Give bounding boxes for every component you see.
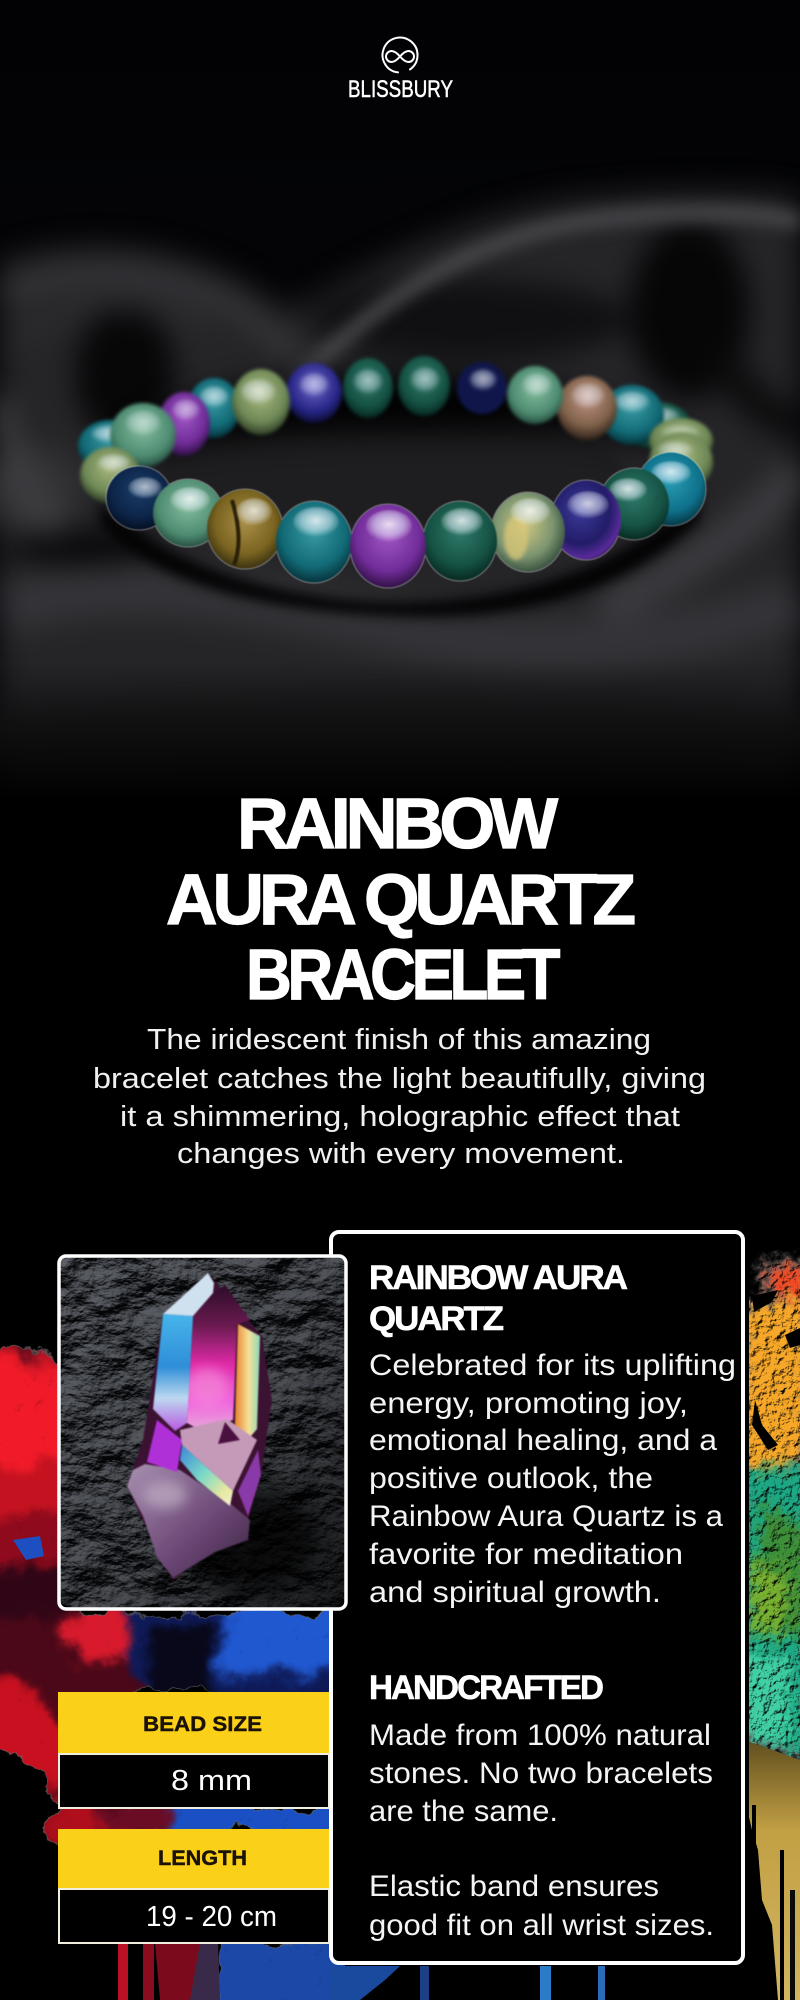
value: 8 mm bbox=[171, 1765, 252, 1797]
text: rainbow aura quartz description: and spiritual growth. bbox=[369, 1576, 661, 1609]
rock background bbox=[57, 1254, 348, 1611]
photo frame bbox=[59, 1256, 346, 1609]
heading: rainbow aura quartz: RAINBOW AURA bbox=[369, 1259, 627, 1297]
photo: rainbow aura quartz crystal bbox=[57, 1254, 348, 1611]
logo bbox=[348, 38, 453, 103]
cloth inside the bracelet bbox=[168, 451, 616, 516]
heading: rainbow aura quartz bbox=[369, 1259, 627, 1338]
hero photo: bracelet on black satin bbox=[0, 172, 800, 770]
description: changes with every movement. bbox=[177, 1138, 625, 1170]
bracelet beads bbox=[78, 356, 713, 588]
spec: bead size bbox=[58, 1692, 329, 1808]
title bbox=[166, 785, 635, 1015]
back beads bbox=[78, 356, 713, 503]
text: rainbow aura quartz description: emotional healing, and a bbox=[369, 1424, 717, 1457]
label: BEAD SIZE bbox=[143, 1713, 262, 1736]
text: handcrafted description: stones. No two bracelets bbox=[369, 1757, 713, 1790]
text: handcrafted description: Made from 100% natural bbox=[369, 1719, 711, 1752]
crystal shadow bbox=[180, 1485, 320, 1595]
text: handcrafted description: are the same. bbox=[369, 1795, 558, 1828]
orange paint black blotches bbox=[752, 1290, 800, 1450]
description: it a shimmering, holographic effect that bbox=[120, 1101, 680, 1133]
text: rainbow aura quartz description: energy, promoting joy, bbox=[369, 1387, 688, 1420]
heading: rainbow aura quartz: QUARTZ bbox=[369, 1300, 503, 1338]
shadow beneath front beads bbox=[100, 490, 700, 617]
text: rainbow aura quartz description: favorite for meditation bbox=[369, 1538, 683, 1571]
heading: handcrafted: HANDCRAFTED bbox=[369, 1669, 603, 1707]
text: rainbow aura quartz description bbox=[369, 1349, 736, 1609]
satin cloth folds bbox=[0, 182, 800, 754]
label: LENGTH bbox=[158, 1847, 247, 1870]
text: handcrafted description: good fit on all wrist sizes. bbox=[369, 1909, 714, 1942]
title: AURA QUARTZ bbox=[166, 861, 635, 940]
front beads bbox=[106, 452, 706, 588]
right fold highlight bbox=[298, 198, 800, 366]
title: RAINBOW bbox=[237, 785, 558, 864]
paint drips: bottom bbox=[118, 1943, 605, 2000]
paint drips: yellow bbox=[745, 1740, 800, 2000]
value: 19 - 20 cm bbox=[146, 1901, 277, 1933]
icon: infinity in circle bbox=[383, 38, 418, 72]
text: rainbow aura quartz description: positive outlook, the bbox=[369, 1462, 653, 1495]
panel: description card bbox=[331, 1232, 743, 1963]
description bbox=[93, 1024, 706, 1170]
brand name: BLISSBURY bbox=[348, 76, 453, 103]
text: rainbow aura quartz description: Rainbow Aura Quartz is a bbox=[369, 1500, 723, 1533]
blue fleck on red bbox=[13, 1536, 44, 1560]
description: The iridescent finish of this amazing bbox=[147, 1024, 651, 1056]
spec: length bbox=[58, 1829, 329, 1943]
paint splash: left red and blue bbox=[0, 1345, 345, 2000]
title: BRACELET bbox=[246, 936, 560, 1015]
crystal bbox=[127, 1273, 272, 1580]
description: bracelet catches the light beautifully, giving bbox=[93, 1063, 706, 1095]
text: rainbow aura quartz description: Celebrated for its uplifting bbox=[369, 1349, 736, 1382]
text: handcrafted description bbox=[369, 1719, 714, 1942]
text: handcrafted description: Elastic band ensures bbox=[369, 1870, 659, 1903]
shadow behind the bead ring bbox=[110, 375, 680, 465]
paint splash: right orange green yellow bbox=[749, 1250, 800, 2000]
